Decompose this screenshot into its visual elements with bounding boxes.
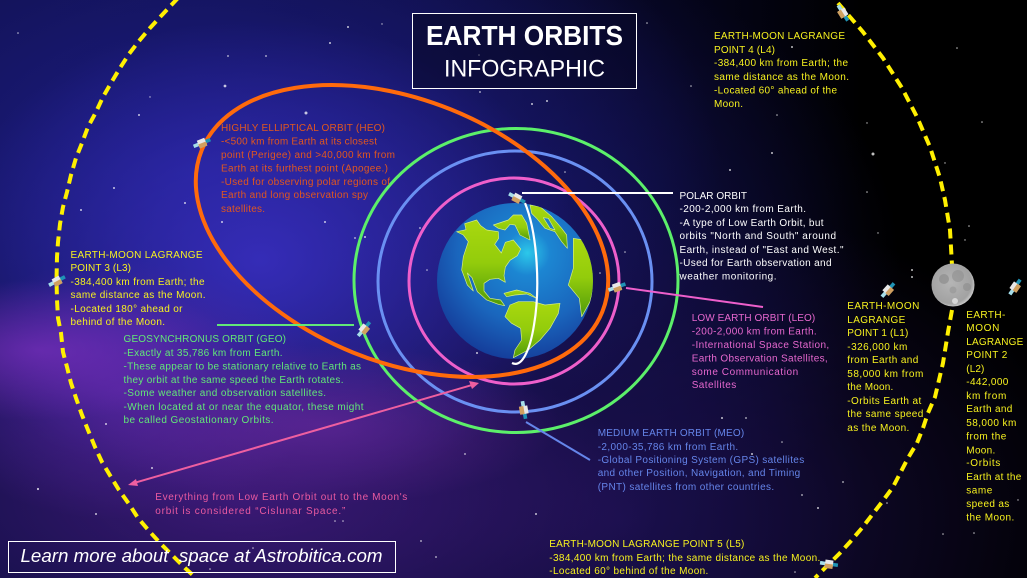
body: HEO: Earth at its furthest point (Apogee.) <box>221 164 388 174</box>
body: L2: -442,000 <box>966 377 1009 388</box>
body: L3: same distance as the Moon. <box>70 290 206 301</box>
satellite: L5 <box>819 559 838 570</box>
body: L5: -Located 60° behind of the Moon. <box>549 566 708 577</box>
panel: L4 <box>714 31 849 110</box>
body: L2: km from <box>966 391 1006 402</box>
body: MEO: -Global Positioning System (GPS) satellites <box>598 455 804 466</box>
body: L1: the same speed <box>847 409 923 420</box>
body: Polar: -Used for Earth observation and <box>680 258 832 269</box>
callout: cislunar space: orbit is considered “Cislunar Space.” <box>155 506 345 517</box>
body: L4: -384,400 km from Earth; the <box>714 58 848 69</box>
body: Polar <box>678 204 844 282</box>
heading: L3 <box>70 250 203 274</box>
body: L2: Earth at the <box>966 472 1022 483</box>
heading: Polar: POLAR ORBIT <box>680 191 747 202</box>
body: L2: the Moon. <box>966 512 1014 524</box>
heading: L1: POINT 1 (L1) <box>847 328 908 339</box>
body: L3: -384,400 km from Earth; the <box>70 277 205 288</box>
callout: cislunar space: Everything from Low Earth Orbit out to the Moon's <box>155 492 407 503</box>
heading: L4: EARTH-MOON LAGRANGE <box>714 31 845 42</box>
satellite: L2 <box>1007 277 1024 297</box>
body: GEO: they orbit at the same speed the Earth rotates. <box>124 375 344 386</box>
body: L4: -Located 60° ahead of the <box>714 86 837 96</box>
panel: L3 <box>70 250 206 328</box>
body: GEO: -When located at or near the equator, these might <box>124 402 364 413</box>
body: L1: as the Moon. <box>847 423 909 434</box>
title box <box>412 14 636 88</box>
body: LEO: Earth Observation Satellites, <box>692 354 828 364</box>
body: L1: 58,000 km from <box>847 369 923 380</box>
body: Polar: orbits "North and South" around <box>680 231 836 242</box>
heading: L1: EARTH-MOON <box>847 301 919 312</box>
Moon orbit dashed: left arc <box>56 0 196 578</box>
body: L1: from Earth and <box>847 355 918 366</box>
heading: L2: MOON <box>966 323 999 334</box>
orbit ring: LEO <box>409 178 619 384</box>
body: LEO: -International Space Station, <box>692 340 829 351</box>
footer link box <box>8 542 396 572</box>
body: L5: -384,400 km from Earth; the same distance as the Moon. <box>549 553 820 564</box>
satellite: L4 <box>834 3 851 23</box>
satellite: L3 <box>47 273 67 289</box>
heading: L4: POINT 4 (L4) <box>714 45 775 56</box>
body: L4 <box>714 58 849 110</box>
satellite: GEO <box>355 320 373 339</box>
body: GEO: -Some weather and observation satellites. <box>124 388 326 399</box>
body: LEO <box>692 326 829 391</box>
body: GEO: -These appear to be stationary relative to Earth as <box>124 362 361 372</box>
body: LEO: -200-2,000 km from Earth. <box>692 326 817 338</box>
body: GEO: be called Geostationary Orbits. <box>124 415 274 426</box>
subtitle: Infographic: INFOGRAPHIC <box>444 56 605 82</box>
body: Polar: -200-2,000 km from Earth. <box>680 204 806 215</box>
orbit ring: MEO <box>378 151 652 412</box>
body: L2: Earth and <box>966 404 1012 415</box>
panel: Polar <box>678 191 844 282</box>
footer link box: Learn more about space at Astrobitica.com <box>20 546 383 566</box>
Moon orbit dashed: right arc <box>838 3 952 265</box>
heading: L2: (L2) <box>966 364 984 375</box>
callout: cislunar space <box>155 492 407 517</box>
heading: L3: EARTH-MOON LAGRANGE <box>70 250 203 261</box>
body: L2: -Orbits <box>966 458 1000 469</box>
satellite: HEO <box>192 136 212 151</box>
panel: HEO <box>221 123 395 215</box>
Earth globe <box>437 203 595 359</box>
title: Earth Orbits: EARTH ORBITS <box>426 20 623 51</box>
body: MEO <box>598 442 804 493</box>
orbit ring: GEO <box>354 128 678 432</box>
body: L4: Moon. <box>714 99 743 110</box>
panel: L5 <box>549 539 820 577</box>
heading: L3: POINT 3 (L3) <box>70 263 131 274</box>
heading: LEO: LOW EARTH ORBIT (LEO) <box>692 313 815 324</box>
body: L2: from the <box>966 432 1007 442</box>
leader line: LEO <box>626 288 763 307</box>
heading: L2: LAGRANGE <box>966 337 1024 348</box>
body: L2: 58,000 km <box>966 418 1016 429</box>
body: GEO <box>124 348 364 426</box>
Moon orbit dashed: lower right arc <box>815 310 952 578</box>
body: Polar: Earth, instead of "East and West." <box>680 245 844 256</box>
orbit ring: HEO <box>153 29 651 433</box>
leader line: GEO <box>217 324 354 326</box>
satellite: Polar <box>507 190 527 206</box>
body: L2 <box>966 377 1022 524</box>
body: L1: -326,000 km <box>847 342 907 353</box>
double arrow: cislunar <box>128 381 479 486</box>
body: Polar: -A type of Low Earth Orbit, but <box>680 218 824 229</box>
body: HEO: -<500 km from Earth at its closest <box>221 136 377 148</box>
panel: L1 <box>847 301 923 434</box>
Moon <box>932 264 974 306</box>
panel: MEO <box>598 428 804 493</box>
satellite: MEO <box>518 400 530 420</box>
body: LEO: Satellites <box>692 380 736 391</box>
heading: GEO: GEOSYNCHRONUS ORBIT (GEO) <box>124 334 286 345</box>
heading: L2: POINT 2 <box>966 350 1008 361</box>
satellite: LEO <box>607 280 627 294</box>
body: L4: same distance as the Moon. <box>714 72 849 83</box>
heading: L1 <box>847 301 919 339</box>
body: L5 <box>549 553 820 577</box>
satellite: L1 <box>879 281 897 300</box>
heading: L5: EARTH-MOON LAGRANGE POINT 5 (L5) <box>549 539 744 550</box>
heading: HEO: HIGHLY ELLIPTICAL ORBIT (HEO) <box>221 123 385 134</box>
body: L3: -Located 180° ahead or <box>70 304 183 315</box>
body: HEO: satellites. <box>221 204 265 215</box>
body: GEO: -Exactly at 35,786 km from Earth. <box>124 348 282 359</box>
panel: L2 <box>966 310 1024 524</box>
body: LEO: some Communication <box>692 367 798 378</box>
body: MEO: and other Position, Navigation, and Timing <box>598 468 800 479</box>
panel: GEO <box>124 334 364 426</box>
body: Polar: weather monitoring. <box>678 272 776 282</box>
body: HEO <box>221 136 395 215</box>
panel: LEO <box>692 313 829 391</box>
body: L1 <box>847 342 923 434</box>
polar orbit arc <box>512 203 537 364</box>
body: L1: -Orbits Earth at <box>847 396 922 407</box>
body: L2: Moon. <box>966 446 995 456</box>
body: HEO: Earth and long observation spy <box>221 190 368 201</box>
leader line: MEO <box>526 422 590 460</box>
body: L2: same <box>966 486 993 496</box>
body: L1: the Moon. <box>847 382 893 393</box>
heading: L2: EARTH- <box>966 310 1005 321</box>
heading: L2 <box>966 310 1024 375</box>
heading: MEO: MEDIUM EARTH ORBIT (MEO) <box>598 428 744 439</box>
body: MEO: (PNT) satellites from other countries. <box>598 482 774 493</box>
body: MEO: -2,000-35,786 km from Earth. <box>598 442 738 453</box>
heading: L4 <box>714 31 845 56</box>
body: L3: behind of the Moon. <box>70 317 165 328</box>
body: HEO: -Used for observing polar regions of <box>221 177 390 188</box>
body: HEO: point (Perigee) and >40,000 km from <box>221 150 395 161</box>
heading: L1: LAGRANGE <box>847 315 906 326</box>
body: L3 <box>70 277 206 328</box>
leader line: polar <box>522 192 673 194</box>
body: L2: speed as <box>966 499 1009 510</box>
